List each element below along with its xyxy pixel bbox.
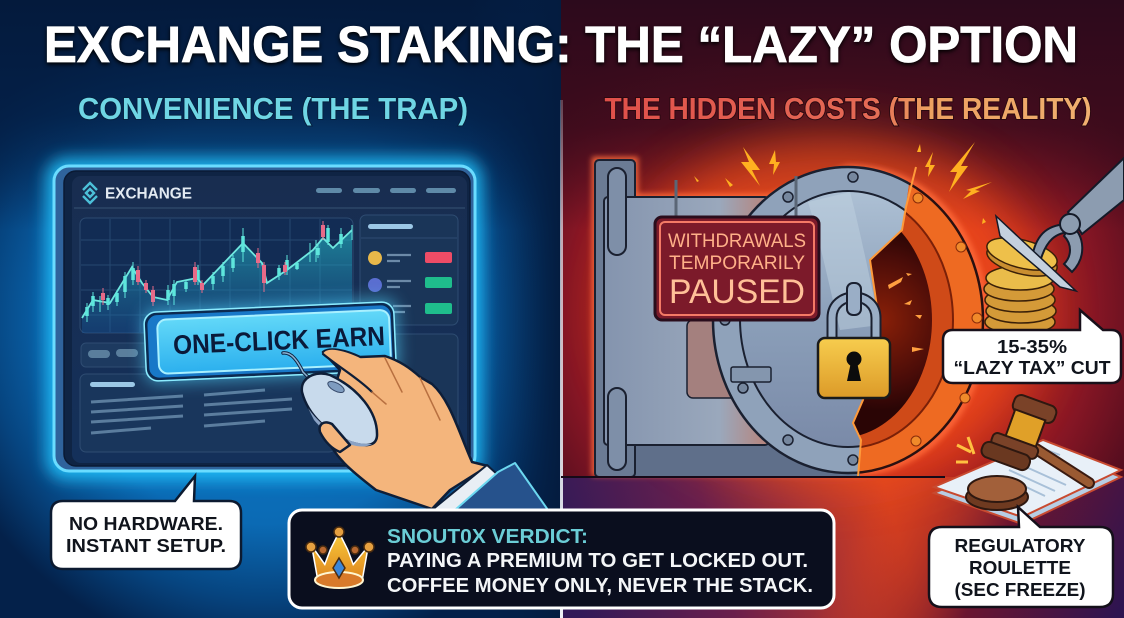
- knuckle creases: [372, 358, 440, 420]
- heading: convenience: CONVENIENCE (THE TRAP): [78, 91, 468, 126]
- button label: ONE-CLICK EARN: [172, 321, 386, 360]
- monitor frame: [54, 166, 475, 471]
- callout: lazy tax: [943, 310, 1121, 383]
- sign: withdrawals paused: TEMPORARILY: [669, 253, 805, 274]
- sign: withdrawals paused: [655, 176, 819, 320]
- callout: no hardware: INSTANT SETUP.: [66, 536, 226, 556]
- door plate: [604, 197, 769, 445]
- icon: crown: [306, 527, 374, 588]
- lower info panels: [80, 334, 458, 452]
- callout: regulatory roulette: ROULETTE: [969, 557, 1071, 578]
- gavel head: [980, 388, 1058, 475]
- callout text: REGULATORY: [954, 535, 1086, 556]
- verdict heading: SNOUT0X VERDICT:: [387, 526, 588, 548]
- coin stack: [984, 232, 1060, 334]
- hand: [322, 350, 488, 509]
- lightning bolts and sparks: [694, 142, 992, 224]
- callout text: 15-35%: [997, 336, 1067, 357]
- suit sleeve: [455, 463, 548, 510]
- sound block: [966, 476, 1028, 510]
- door frame: [595, 160, 635, 477]
- icon: hand on mouse: [283, 350, 548, 510]
- index finger: [323, 350, 400, 404]
- centre divider: [560, 100, 563, 618]
- mouse cord: [283, 353, 313, 382]
- rear recess: [687, 320, 747, 398]
- hinges: [608, 168, 626, 470]
- callout: regulatory roulette: (SEC FREEZE): [954, 579, 1086, 600]
- one-click earn button: [143, 298, 399, 383]
- mouse: [302, 374, 377, 447]
- navigation pills: [316, 188, 456, 193]
- gavel handle: [1033, 447, 1089, 483]
- candlestick chart: [80, 218, 353, 333]
- callout: lazy tax: “LAZY TAX” CUT: [954, 357, 1111, 378]
- vault door left half: [712, 166, 910, 474]
- floor line: [561, 476, 945, 478]
- right background panel: [561, 0, 1124, 618]
- monitor glow: [46, 158, 482, 480]
- impact sparks: [956, 437, 974, 462]
- icon: padlock: [818, 283, 890, 398]
- door plate lower band: [635, 440, 860, 477]
- sign: withdrawals paused: PAUSED: [669, 273, 805, 311]
- callout: regulatory roulette: [929, 507, 1113, 607]
- exchange wordmark: EXCHANGE: [105, 186, 192, 202]
- icon: coin stack and claw: [984, 158, 1124, 334]
- vault halo: [595, 160, 985, 473]
- papers: [934, 440, 1121, 524]
- crack line: [853, 167, 916, 477]
- blade: [996, 216, 1076, 291]
- vault glow: [615, 135, 1045, 485]
- left background panel: [0, 0, 561, 618]
- monitor screen: [72, 176, 467, 463]
- sign text: WITHDRAWALS: [668, 231, 806, 252]
- icon: gavel on papers: [934, 388, 1121, 524]
- thumb: [320, 422, 350, 452]
- callout: no hardware: [51, 476, 241, 569]
- shirt cuff: [432, 465, 498, 510]
- market side panel: [360, 215, 458, 325]
- vault door right half: [854, 182, 984, 474]
- robot arm: [1032, 158, 1124, 272]
- panel: convenience monitor: [46, 158, 482, 480]
- callout text: NO HARDWARE.: [69, 514, 223, 534]
- panel: verdict: COFFEE MONEY ONLY, NEVER THE STACK.: [387, 575, 813, 597]
- title: EXCHANGE STAKING: THE “LAZY” OPTION: [44, 16, 1078, 73]
- exchange logo: [83, 183, 97, 203]
- verdict text: PAYING A PREMIUM TO GET LOCKED OUT.: [387, 550, 808, 572]
- panel: verdict: [289, 510, 834, 608]
- panel: hidden costs vault: [561, 135, 1045, 485]
